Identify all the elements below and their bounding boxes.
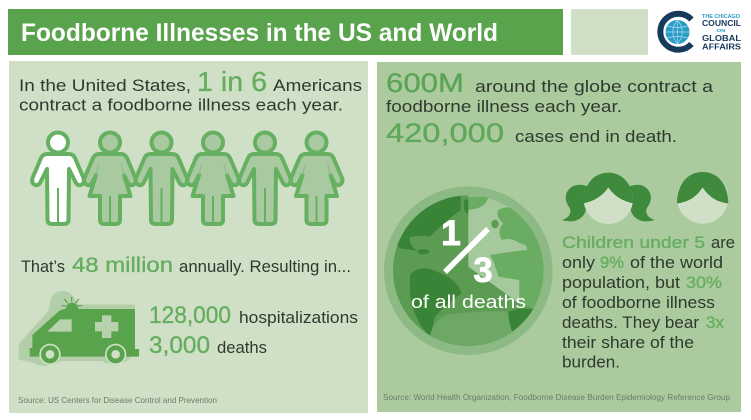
children text block: only — [562, 253, 596, 272]
people icons: 1 in 6 — [32, 132, 342, 225]
fraction numerator: 1 — [441, 214, 461, 253]
intro text: 1 in 6 — [197, 66, 267, 97]
children text block: burden. — [562, 352, 620, 372]
annual total text: That’s — [21, 257, 65, 276]
children text block: deaths. They bear — [562, 313, 699, 332]
children text block: 9% — [600, 253, 624, 272]
fraction slash — [445, 229, 488, 272]
annual total text — [21, 254, 351, 277]
title banner — [8, 9, 563, 55]
panel: World — [377, 62, 741, 412]
fraction denominator: 3 — [473, 251, 493, 290]
logo: Chicago Council on Global Affairs: ON — [716, 28, 726, 33]
deaths stat: deaths — [217, 338, 267, 357]
children text block: population, but — [562, 273, 680, 292]
intro text — [19, 66, 362, 114]
logo: Chicago Council on Global Affairs — [660, 14, 742, 51]
global deaths text — [386, 118, 677, 148]
panel: United States — [9, 61, 368, 413]
global deaths text: 420,000 — [386, 118, 504, 148]
children text block: 30% — [686, 273, 722, 292]
title: Foodborne Illnesses in the US and World — [21, 19, 498, 47]
children text block: their share of the — [562, 333, 694, 352]
children text block: are — [711, 233, 735, 252]
global cases text: 600M — [386, 68, 464, 98]
children text block — [562, 233, 735, 372]
children text block: of the world — [630, 253, 723, 272]
hospitalizations stat: hospitalizations — [239, 308, 358, 327]
global cases text: around the globe contract a — [475, 77, 714, 96]
logo: Chicago Council on Global Affairs: GLOBAL — [702, 34, 741, 43]
children text block: Children under 5 — [562, 233, 705, 252]
hospitalizations stat — [149, 302, 358, 329]
decorative header block — [571, 9, 648, 55]
global deaths text: cases end in death. — [515, 127, 677, 146]
globe: one third of all deaths — [384, 186, 553, 355]
icon: boy head — [677, 172, 728, 224]
children text block: 3x — [706, 313, 724, 332]
global cases text — [386, 68, 714, 116]
icon: girl head — [562, 173, 655, 224]
deaths stat: 3,000 — [149, 332, 210, 359]
logo: Chicago Council on Global Affairs: THE CHICAGO — [702, 14, 741, 20]
source: World: Source: World Health Organization, Foodborne Disease Burden Epidemiology Reference Group — [383, 393, 731, 402]
logo: Chicago Council on Global Affairs: AFFAIRS — [702, 42, 742, 51]
intro text: contract a foodborne illness each year. — [19, 96, 343, 114]
intro text: Americans — [273, 76, 362, 95]
icon: ambulance — [18, 291, 139, 366]
global cases text: foodborne illness each year. — [386, 97, 622, 116]
annual total text: 48 million — [72, 254, 173, 277]
intro text: In the United States, — [19, 76, 191, 95]
source: US: Source: US Centers for Disease Control and Prevention — [18, 396, 217, 405]
children text block: of foodborne illness — [562, 293, 715, 312]
annual total text: annually. Resulting in... — [179, 257, 351, 276]
of all deaths label: of all deaths — [411, 292, 526, 312]
deaths stat — [149, 332, 267, 359]
logo: Chicago Council on Global Affairs: COUNCIL — [702, 19, 741, 28]
hospitalizations stat: 128,000 — [149, 302, 231, 329]
